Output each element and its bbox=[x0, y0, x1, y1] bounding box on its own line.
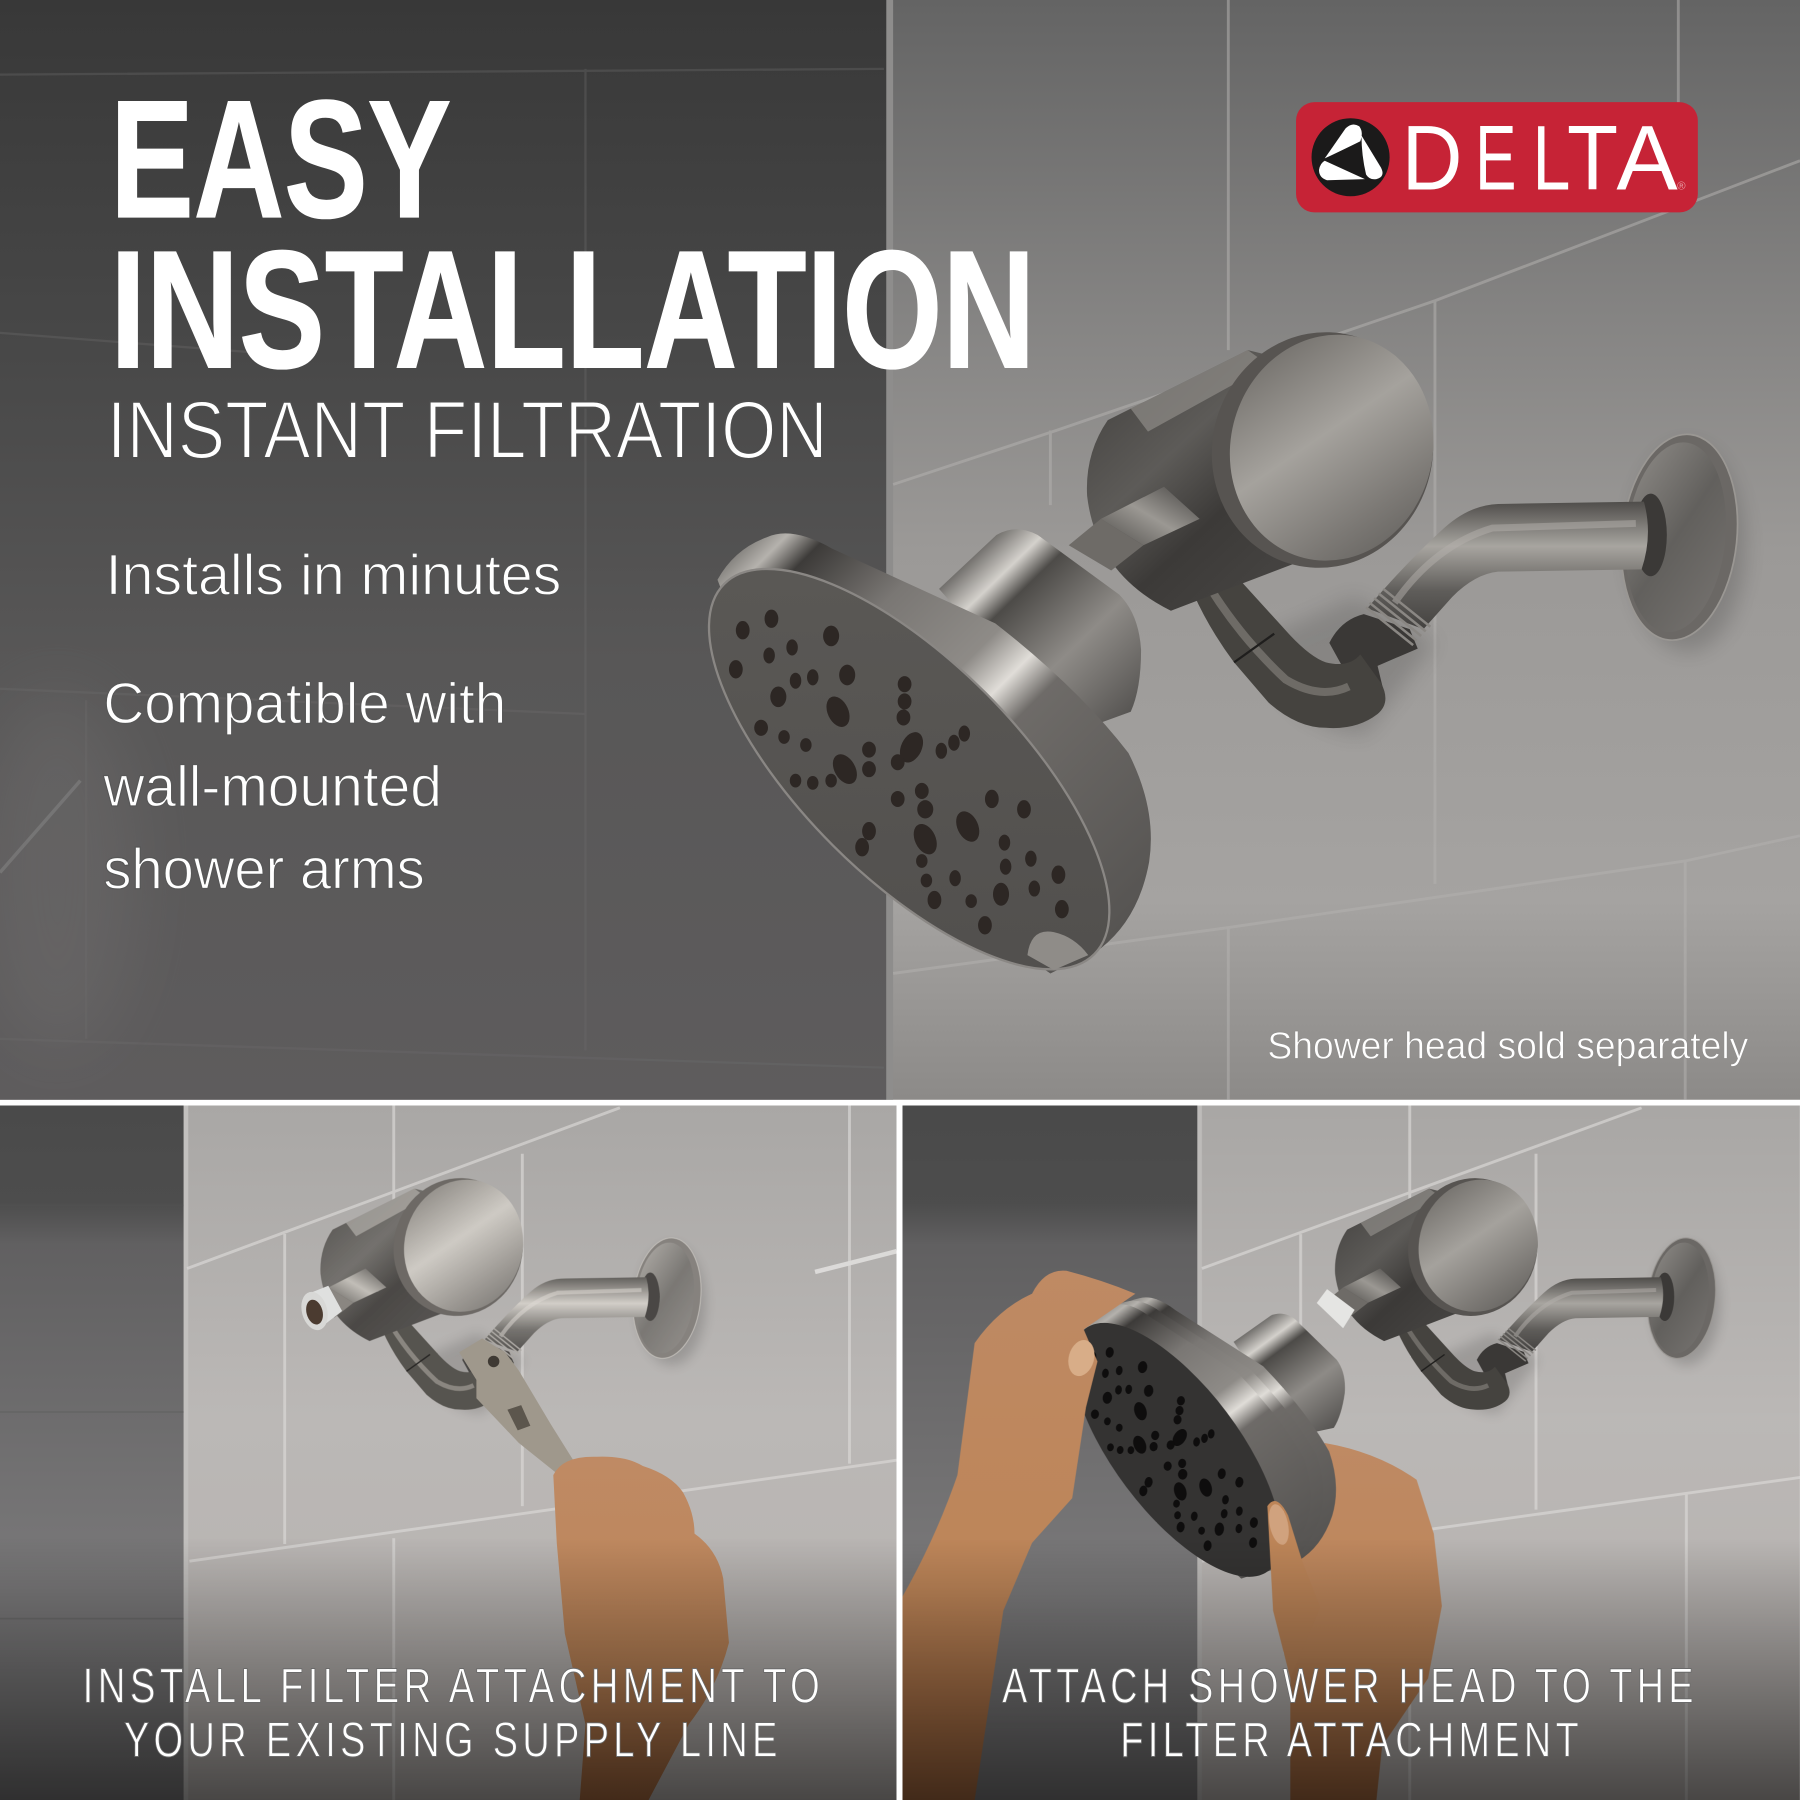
photo: left hand bbox=[902, 1271, 1135, 1800]
text block: compatibility bbox=[102, 672, 506, 902]
text block: compatibility: shower arms bbox=[103, 838, 425, 902]
panel: step 2 attach shower head bbox=[902, 1105, 1800, 1800]
product: shower head bbox=[648, 508, 1171, 1031]
text block: installs in minutes: Installs in minutes bbox=[106, 544, 561, 608]
panel: step 1 install filter bbox=[0, 1105, 897, 1800]
caption: step 1: YOUR EXISTING SUPPLY LINE bbox=[124, 1712, 782, 1767]
icon: threaded outlet bbox=[301, 1286, 342, 1330]
caption: step 1 bbox=[83, 1658, 824, 1767]
photo: hand holding wrench bbox=[553, 1457, 729, 1800]
note: sold separately: Shower head sold separately bbox=[1267, 1025, 1748, 1067]
logo: Delta: L bbox=[1533, 107, 1570, 209]
logo: Delta: ® bbox=[1677, 180, 1686, 192]
subtitle: INSTANT FILTRATION bbox=[107, 385, 828, 476]
product: filter attachment bbox=[310, 1164, 707, 1414]
icon: white thread bbox=[1317, 1289, 1355, 1328]
logo: Delta: T bbox=[1567, 107, 1618, 209]
overlay: bottom fade bbox=[0, 1538, 897, 1800]
product: shower head held bbox=[1084, 1297, 1346, 1578]
photo: right thumb bbox=[1267, 1501, 1302, 1678]
logo: Delta: D bbox=[1402, 107, 1462, 209]
panel: hero photo background bbox=[0, 0, 1800, 1100]
text block: compatibility: Compatible with bbox=[103, 672, 506, 736]
photo: right hand fingers bbox=[1286, 1443, 1442, 1800]
product: filter attachment bbox=[1324, 1164, 1721, 1414]
logo: Delta: E bbox=[1475, 107, 1516, 209]
text block: compatibility: wall-mounted bbox=[102, 755, 442, 819]
logo: Delta: A bbox=[1616, 107, 1678, 209]
overlay: bottom fade bbox=[902, 1538, 1800, 1800]
caption: step 2: FILTER ATTACHMENT bbox=[1120, 1712, 1583, 1767]
icon: wrench bbox=[459, 1339, 580, 1480]
title: INSTALLATION bbox=[110, 215, 1035, 403]
title bbox=[110, 65, 1035, 403]
caption: step 1: INSTALL FILTER ATTACHMENT TO bbox=[83, 1658, 824, 1713]
product: filter attachment and arm bbox=[1069, 309, 1747, 735]
caption: step 2 bbox=[1002, 1658, 1698, 1767]
logo: Delta bbox=[1296, 102, 1698, 212]
title: EASY bbox=[110, 65, 451, 253]
